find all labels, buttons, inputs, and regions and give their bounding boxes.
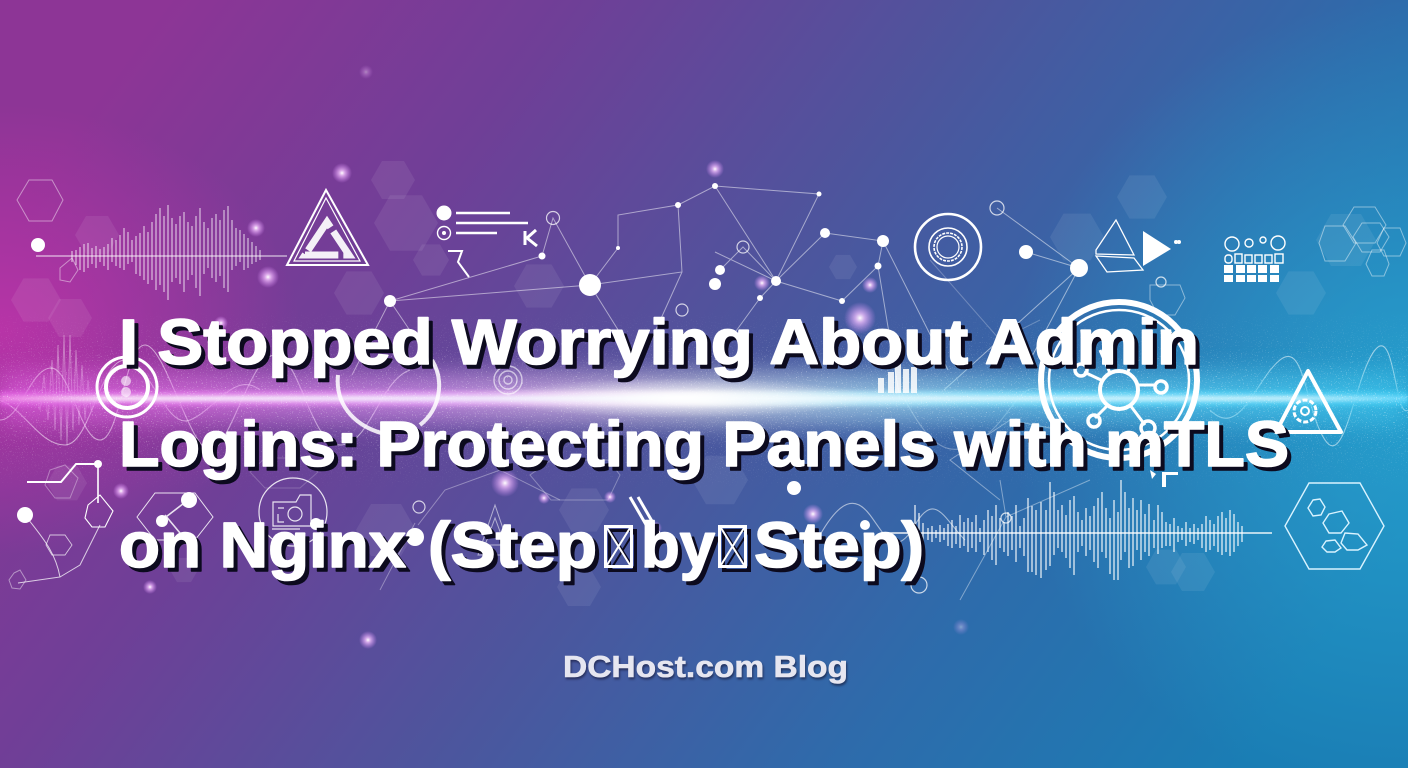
sine waves [0,345,1408,543]
icon: linked nodes hexagon [137,492,213,540]
title: Step) [754,509,924,581]
subtitle: blog name: DCHost.com Blog [563,649,848,684]
waveform: right [915,480,1242,580]
waveform baseline left [31,238,287,256]
title: on Nginx [119,509,406,581]
sparkles [113,65,969,649]
title: Logins: Protecting Panels with mTLS [119,408,1289,480]
icon: hexagon outline right [1285,483,1384,569]
square marks near ring [1150,470,1178,487]
icon: camera in circle [259,478,327,546]
faint hexagon pattern [11,161,1376,606]
title: by [641,509,715,581]
waveform baseline right [888,532,1272,534]
icon: glyph grid [1224,236,1285,282]
icon: concentric ring top [915,214,981,280]
star particle field [0,310,1408,490]
icon: hub in large ring [1041,302,1197,458]
fine oscilloscope lines left [30,335,95,445]
title: (Step [428,509,597,581]
glowing horizontal band [0,374,1408,422]
icon: large broken ring left [338,360,439,436]
icon: small spiral [494,366,522,394]
icon: list card [436,206,537,277]
icon: bar chart [878,363,917,393]
title [119,306,1289,581]
waveform: left [72,205,260,300]
icon: triangle mark low [478,505,512,555]
hexagon outlines [9,180,1406,589]
network nodes [17,183,1088,546]
icon: warning triangle [1276,371,1341,432]
icon: triangle logo [287,190,368,265]
icon: prism and play [1096,220,1181,272]
title: I Stopped Worrying About Admin [119,306,1199,378]
icon: concentric target left [97,357,157,417]
icon: slashes [630,497,660,535]
icon: step circuit left [18,460,113,583]
network outline nodes [413,201,1166,593]
network constellation [352,186,1090,600]
